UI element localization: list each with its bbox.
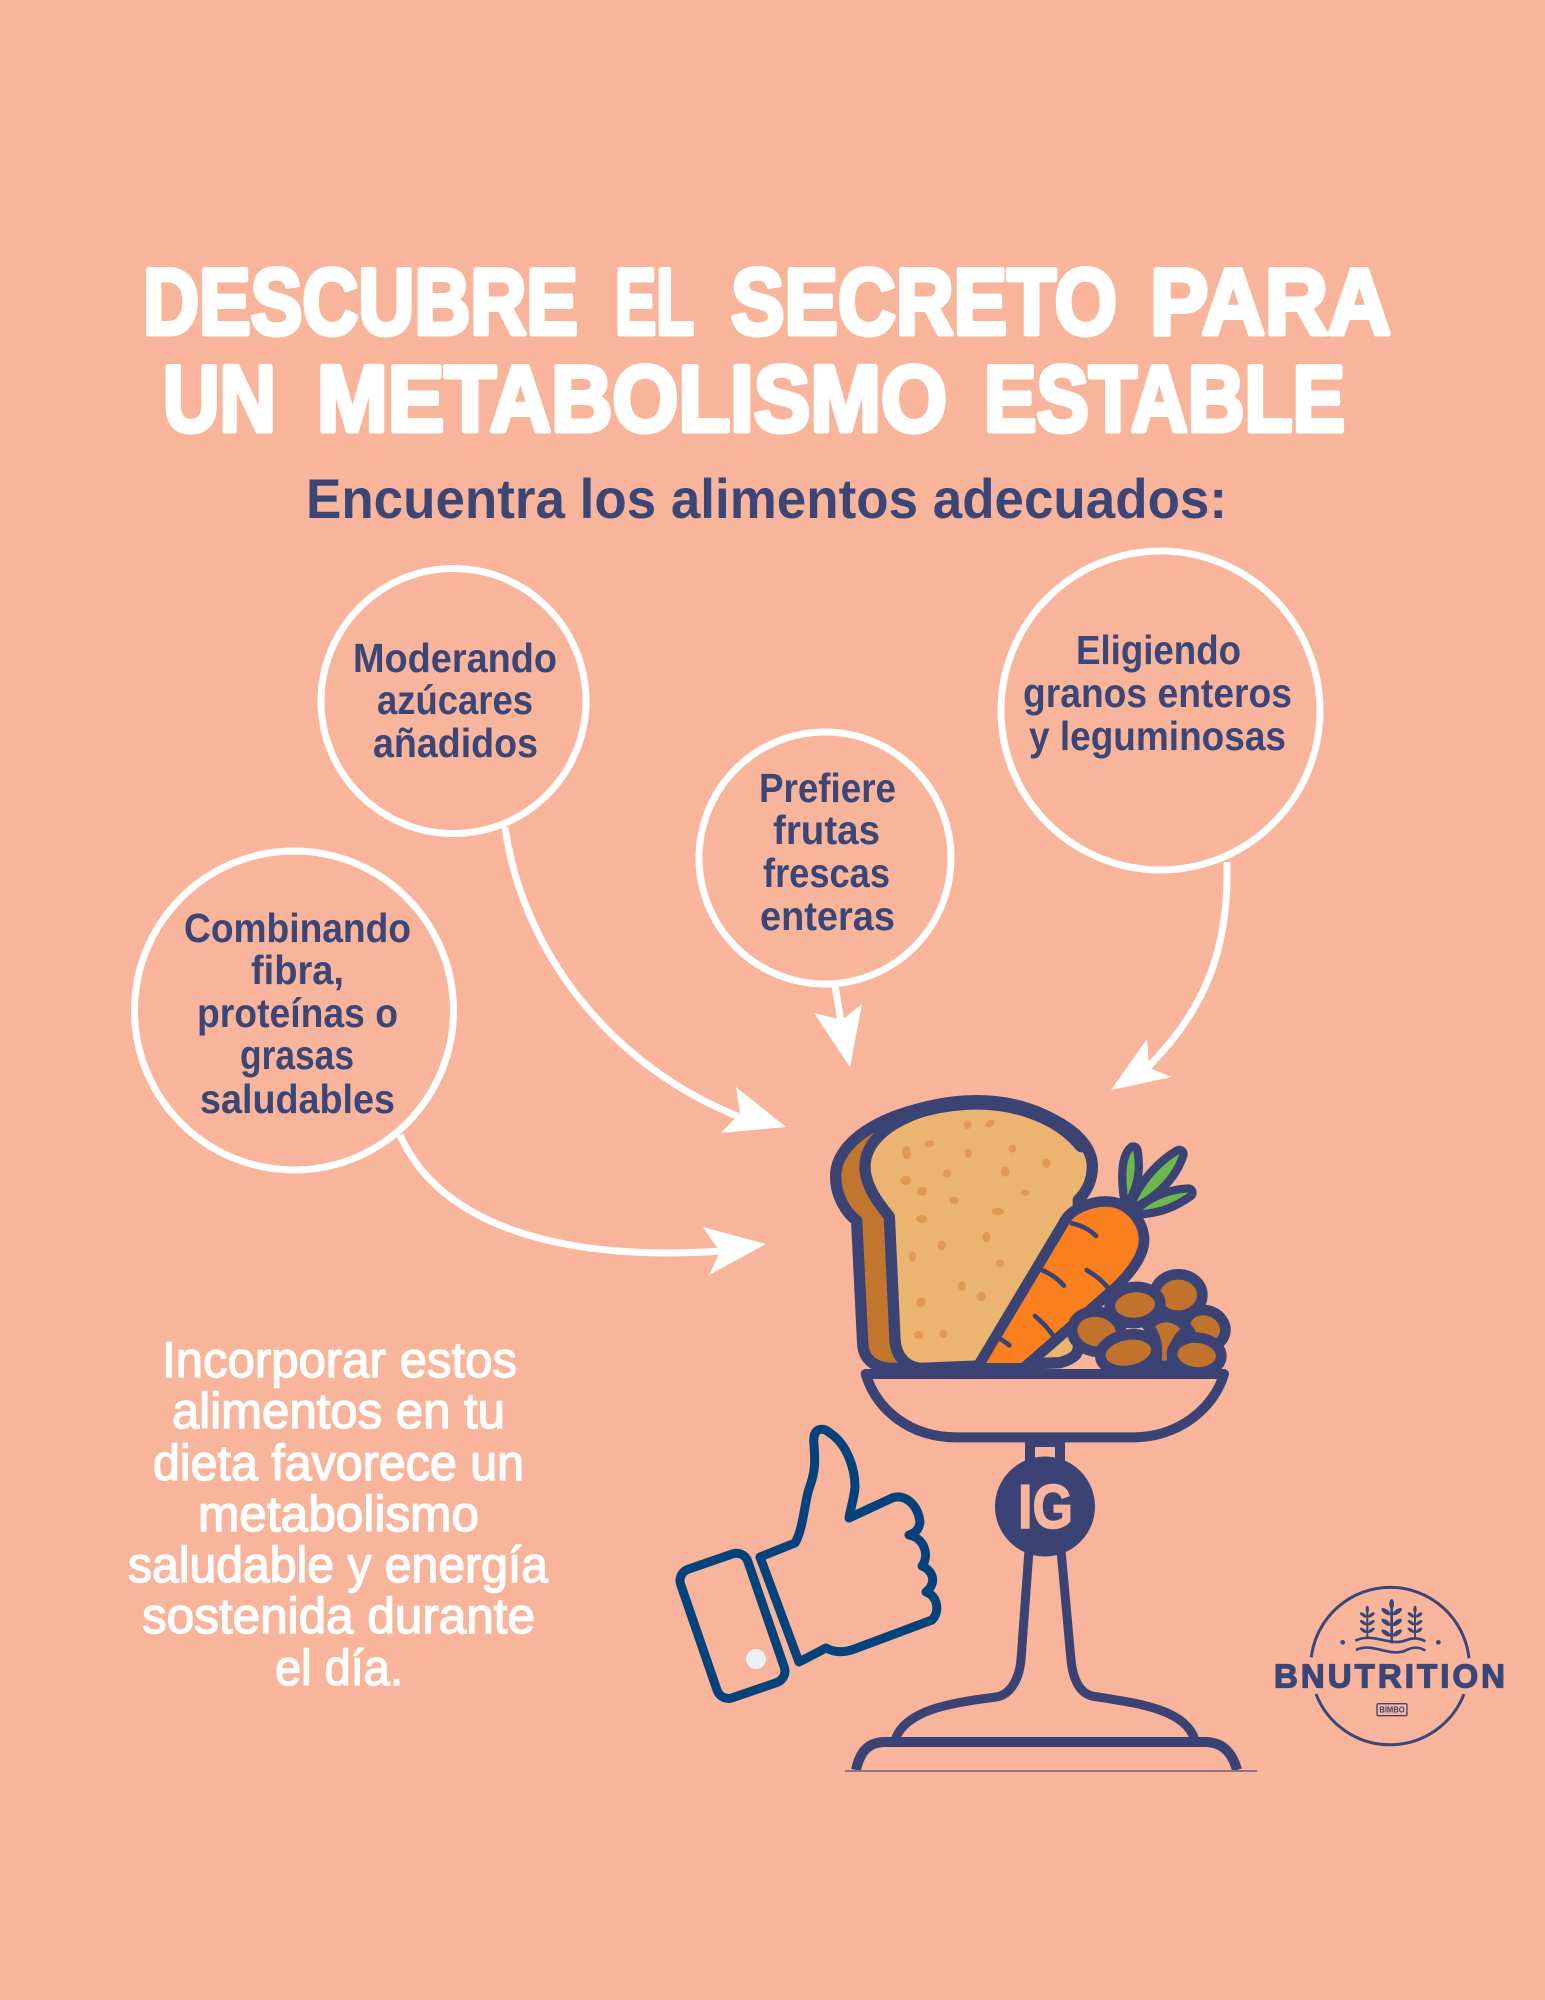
bread back slice (836, 1105, 967, 1368)
panel: moderando azúcares: azúcares (377, 677, 533, 723)
icon: scale with food (836, 1102, 1257, 1771)
arrow: frutas to food (814, 986, 862, 1067)
panel: moderando azúcares (321, 568, 586, 834)
paragraph: Incorporar estos (162, 1332, 517, 1388)
paragraph: alimentos en tu (172, 1383, 505, 1439)
panel: combinando fibra: saludables (200, 1076, 395, 1122)
panel: frutas frescas: Prefiere (759, 765, 896, 811)
food (836, 1102, 1231, 1437)
title: METABOLISMO (317, 346, 947, 451)
logo: BNUTRITION: BNUTRITION (1274, 1657, 1505, 1694)
panel: granos enteros: y leguminosas (1029, 713, 1286, 759)
logo: Bimbo mark: BIMBO (1379, 1705, 1405, 1715)
title: SECRETO (731, 249, 1117, 354)
paragraph (128, 1332, 548, 1696)
panel: frutas frescas: frescas (763, 850, 890, 896)
wheat (1340, 1599, 1441, 1645)
panel: combinando fibra: fibra, (251, 947, 344, 993)
title: EL (615, 249, 694, 354)
panel: frutas frescas: frutas (773, 807, 880, 853)
panel: moderando azúcares: Moderando (353, 635, 557, 681)
arrow: granos to food (1111, 862, 1227, 1090)
icon: thumbs up (677, 1429, 937, 1702)
panel: combinando fibra: Combinando (184, 905, 411, 951)
panel: frutas frescas: enteras (760, 893, 895, 939)
carrot (977, 1201, 1144, 1368)
paragraph: el día. (275, 1640, 403, 1696)
panel: combinando fibra: grasas (240, 1032, 354, 1078)
panel: combinando fibra: proteínas o (197, 990, 398, 1036)
scale IG badge (995, 1456, 1095, 1556)
subtitle: Encuentra los alimentos adecuados: (306, 467, 1227, 530)
panel: moderando azúcares: añadidos (373, 720, 538, 766)
arrow: moderando to food (505, 827, 786, 1133)
bread front slice (865, 1102, 1092, 1368)
title: UN (163, 346, 276, 451)
paragraph: metabolismo (198, 1486, 479, 1542)
title: ESTABLE (984, 346, 1345, 451)
scale IG badge: IG (1018, 1473, 1073, 1542)
carrot leaves (1126, 1151, 1188, 1210)
paragraph: sostenida durante (142, 1588, 535, 1644)
panel: combinando fibra (134, 851, 454, 1170)
title (143, 249, 1391, 451)
beans (1069, 1274, 1231, 1375)
logo: BNUTRITION (1274, 1587, 1505, 1745)
plate (866, 1374, 1224, 1437)
title: PARA (1150, 249, 1391, 354)
panel: granos enteros: granos enteros (1023, 670, 1292, 716)
panel: granos enteros: Eligiendo (1076, 627, 1241, 673)
scale stand (845, 1442, 1257, 1771)
title: DESCUBRE (143, 249, 578, 354)
paragraph: dieta favorece un (153, 1435, 524, 1491)
panel: frutas frescas (699, 732, 951, 984)
arrow: combinando to food (400, 1135, 766, 1275)
panel: granos enteros (1001, 551, 1320, 870)
paragraph: saludable y energía (128, 1537, 548, 1593)
